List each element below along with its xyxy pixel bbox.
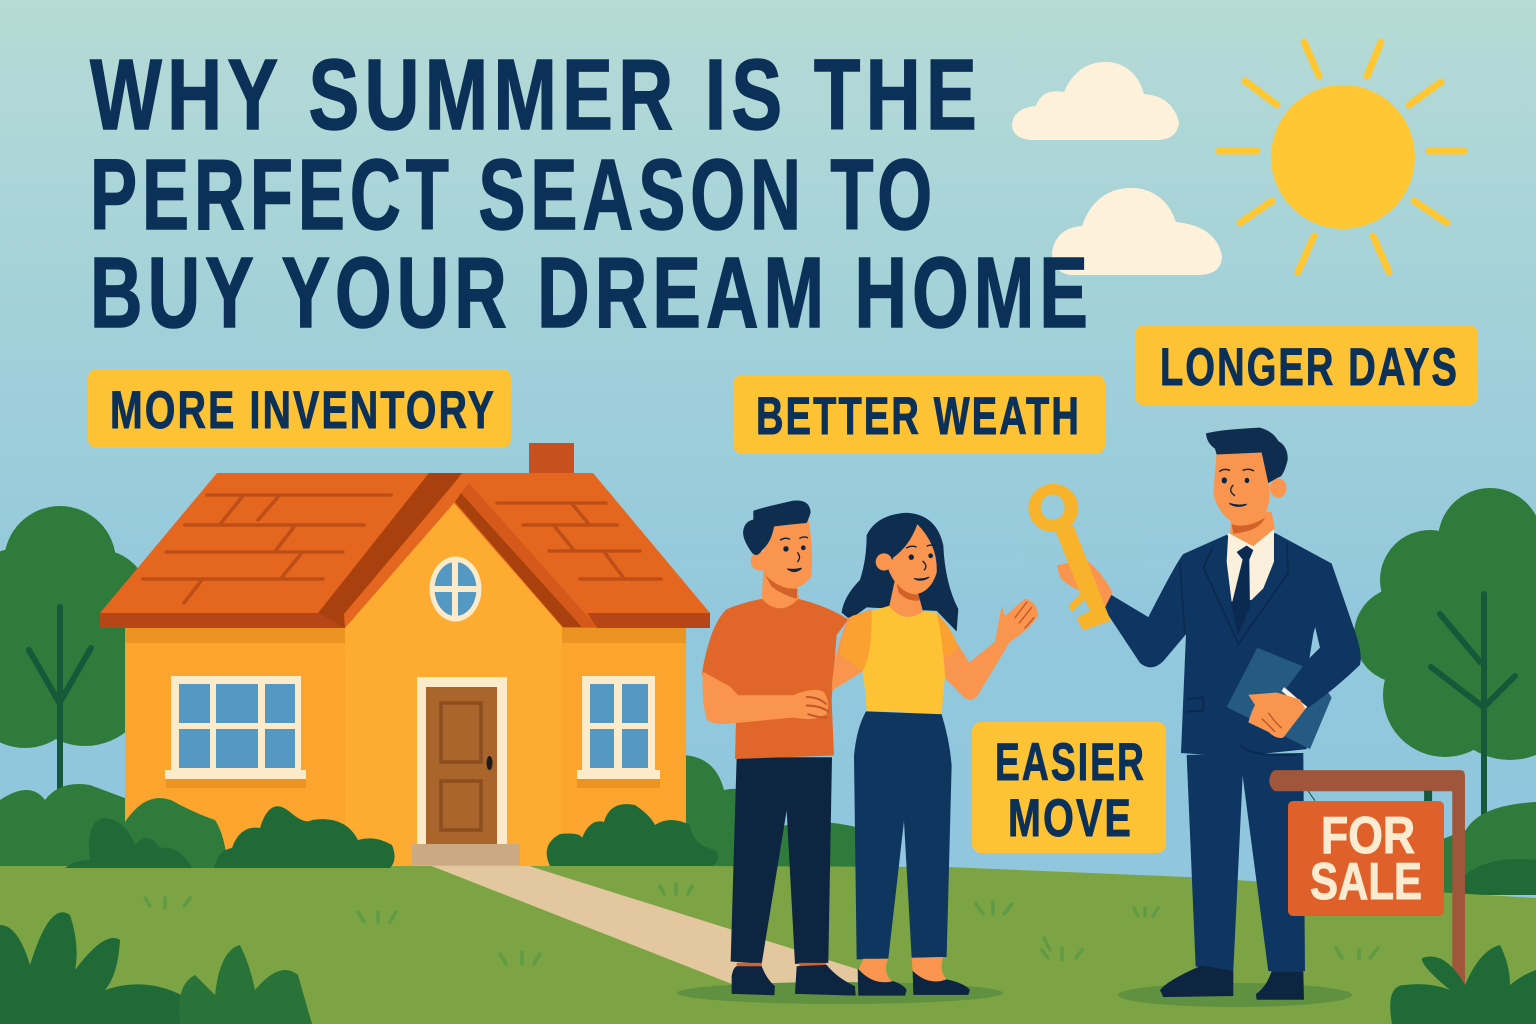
trousers xyxy=(854,711,952,959)
shoulder and arm xyxy=(832,609,873,691)
bushes behind house xyxy=(0,755,1536,895)
neck xyxy=(762,570,799,614)
legs xyxy=(1187,753,1305,971)
roof xyxy=(100,473,710,628)
icon: lower cloud xyxy=(1052,188,1222,275)
lapels xyxy=(1180,542,1297,755)
cuff xyxy=(1282,687,1307,710)
ground shadow: agent xyxy=(1118,983,1352,1007)
man (husband) xyxy=(702,500,856,996)
woman (wife) xyxy=(832,513,1038,996)
round attic window xyxy=(430,556,482,622)
icon: sun xyxy=(1219,42,1464,272)
sleeve patches xyxy=(839,610,958,671)
right window xyxy=(577,676,660,788)
sign text: FOR xyxy=(1321,807,1415,865)
icon: upper cloud xyxy=(1012,62,1179,140)
for sale sign xyxy=(1269,770,1465,986)
neck xyxy=(889,580,923,617)
hair xyxy=(842,513,958,632)
shirt xyxy=(1227,529,1274,602)
folder xyxy=(1227,648,1332,749)
jacket xyxy=(1103,533,1332,757)
front step xyxy=(412,844,520,865)
foreground bush: bottom right xyxy=(1390,945,1536,1024)
label: better weath: BETTER WEATH xyxy=(756,387,1081,446)
forearm xyxy=(1287,564,1361,709)
grass tufts xyxy=(145,884,1378,964)
title: BUY YOUR DREAM HOME xyxy=(90,237,1093,349)
path to front door xyxy=(429,865,870,995)
sign post xyxy=(1269,770,1465,986)
foreground bush: bottom left xyxy=(0,912,312,1024)
label: better weath xyxy=(733,375,1105,454)
ground shadow: couple xyxy=(677,982,1003,1004)
shoes xyxy=(1160,965,1304,1000)
feet xyxy=(858,957,948,984)
title xyxy=(90,39,1093,349)
shrubs in front of house xyxy=(65,798,718,868)
sign board xyxy=(1288,801,1444,916)
yellow top xyxy=(863,606,945,714)
head xyxy=(1206,428,1288,534)
title: WHY SUMMER IS THE xyxy=(90,39,982,151)
walls xyxy=(125,600,686,867)
real estate agent xyxy=(1028,428,1361,1000)
flats xyxy=(858,968,970,996)
hand holding key xyxy=(1057,560,1113,608)
sign text xyxy=(1310,807,1422,911)
dark bush behind sign xyxy=(1465,859,1536,895)
left window xyxy=(165,676,306,788)
sign text: SALE xyxy=(1310,853,1422,911)
ground xyxy=(0,866,1536,1024)
label: more inventory: MORE INVENTORY xyxy=(110,381,496,440)
waving arm xyxy=(937,599,1038,700)
arm xyxy=(703,671,828,724)
label: easier move xyxy=(972,722,1166,853)
head xyxy=(876,524,937,601)
house xyxy=(100,443,710,867)
head xyxy=(743,500,812,599)
shoes xyxy=(732,965,856,996)
hand on folder xyxy=(1248,692,1305,738)
t-shirt xyxy=(702,599,848,759)
label: easier move: MOVE xyxy=(1008,789,1133,848)
left tree xyxy=(0,506,151,792)
label: longer days xyxy=(1135,325,1478,405)
title: PERFECT SEASON TO xyxy=(90,139,937,251)
trousers xyxy=(731,757,832,964)
chimney xyxy=(529,443,574,474)
neck xyxy=(1230,512,1275,548)
socks xyxy=(737,963,826,967)
label: easier move: EASIER xyxy=(995,733,1146,792)
label: more inventory xyxy=(88,369,511,448)
tie xyxy=(1232,546,1253,634)
front door xyxy=(417,677,507,844)
right tree xyxy=(1354,488,1536,815)
icon: gold key xyxy=(1028,484,1111,630)
